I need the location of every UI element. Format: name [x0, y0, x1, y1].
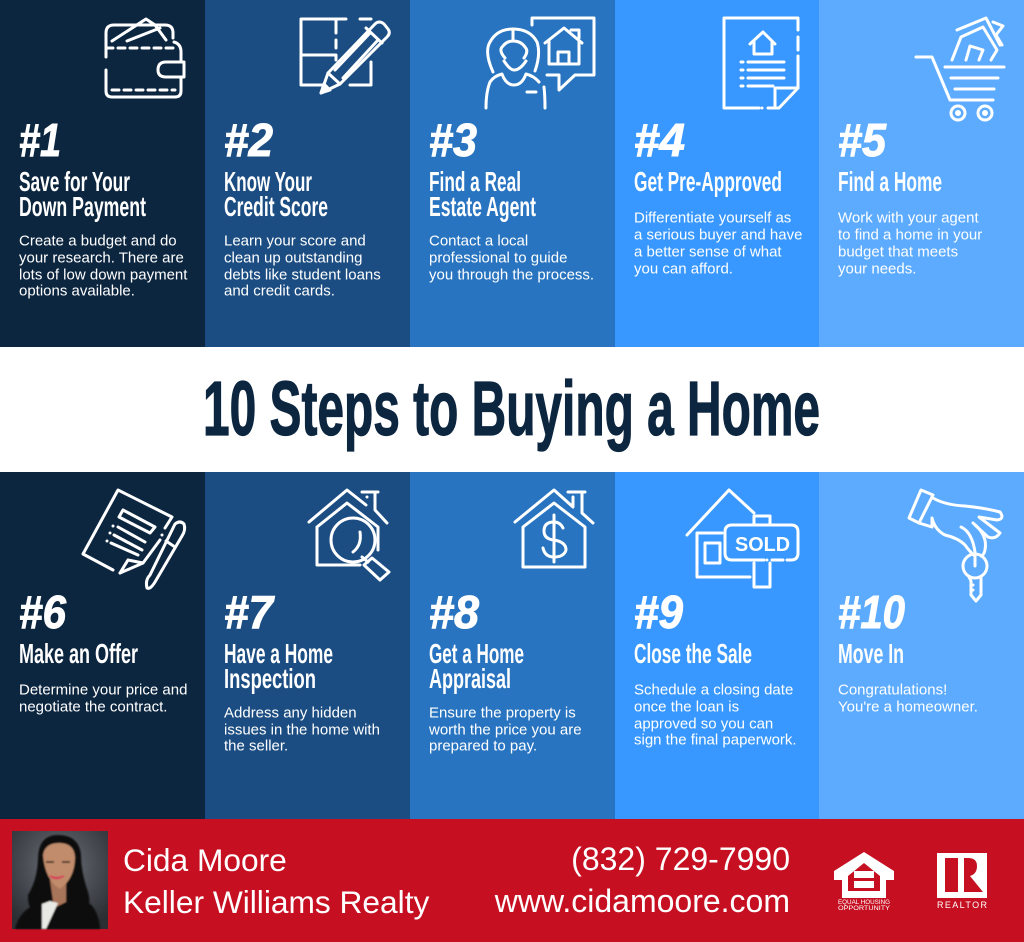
text block: negotiate the contract.	[19, 698, 167, 716]
text block: Ensure the property is	[429, 704, 576, 722]
text block	[634, 210, 802, 278]
text block: your needs.	[838, 260, 916, 278]
icon: house and magnifying glass	[309, 490, 389, 580]
text block: budget that meets	[838, 244, 958, 260]
icon: document with house	[724, 18, 798, 108]
step number: #3	[429, 114, 477, 166]
text block: lots of low down payment	[19, 266, 188, 284]
heading	[429, 166, 536, 222]
icon: equal housing opportunity: OPPORTUNITY	[838, 906, 890, 912]
text block: You're a homeowner.	[838, 698, 978, 716]
text block: issues in the home with	[224, 722, 380, 738]
heading	[224, 166, 328, 222]
text block: options available.	[19, 282, 135, 300]
heading: Get a Home	[429, 638, 524, 669]
text block: Congratulations!	[838, 682, 947, 698]
icon: realtor	[937, 853, 988, 910]
icon: hand holding key	[909, 490, 1002, 601]
text block: Determine your price and	[19, 682, 187, 698]
panel: step 9	[615, 472, 819, 819]
text block: a serious buyer and have	[634, 226, 802, 244]
step number: #4	[634, 114, 685, 166]
panel: step 4	[615, 0, 819, 347]
text block: Learn your score and	[224, 232, 366, 250]
step number: #8	[429, 586, 479, 638]
text block: and credit cards.	[224, 282, 335, 300]
text block: to find a home in your	[838, 226, 982, 244]
text block: clean up outstanding	[224, 250, 362, 266]
heading: Have a Home	[224, 638, 333, 669]
heading: Inspection	[224, 663, 316, 694]
step number: #9	[634, 586, 683, 638]
icon: equal housing opportunity: EQUAL HOUSING	[838, 900, 890, 906]
panel: step 10	[819, 472, 1024, 819]
heading	[19, 166, 146, 222]
step number: #1	[19, 114, 61, 166]
text block: your research. There are	[19, 250, 184, 266]
panel: step 8	[410, 472, 615, 819]
panel: step 6	[0, 472, 205, 819]
website: www.cidamoore.com	[494, 883, 790, 919]
text block: Schedule a closing date	[634, 682, 793, 698]
heading: Appraisal	[429, 663, 511, 694]
text block	[224, 232, 381, 300]
heading: Credit Score	[224, 191, 328, 222]
step number: #7	[224, 586, 275, 638]
icon: floor plan and pencil	[301, 19, 389, 93]
panel: step 3	[410, 0, 615, 347]
sign text: SOLD	[735, 534, 790, 556]
text block: Address any hidden	[224, 704, 357, 722]
panel: step 2	[205, 0, 410, 347]
text block: Differentiate yourself as	[634, 210, 791, 226]
text block: Contact a local	[429, 232, 528, 250]
text block	[634, 682, 797, 748]
icon: agent with speech bubble	[486, 18, 594, 108]
heading: Find a Home	[838, 166, 942, 197]
text block	[19, 232, 188, 300]
heading	[224, 638, 333, 694]
heading: Get Pre-Approved	[634, 166, 782, 197]
text block: you can afford.	[634, 260, 733, 278]
heading: Save for Your	[19, 166, 130, 197]
text block: debts like student loans	[224, 266, 381, 284]
heading	[429, 638, 524, 694]
text block: Work with your agent	[838, 210, 979, 226]
text block: approved so you can	[634, 716, 773, 732]
step number: #10	[838, 586, 905, 638]
heading: Move In	[838, 638, 904, 669]
text block: a better sense of what	[634, 244, 782, 260]
step number: #2	[224, 114, 273, 166]
icon: equal housing opportunity	[834, 852, 894, 912]
step number: #6	[19, 586, 66, 638]
text block	[224, 704, 380, 754]
agent name: Cida Moore	[123, 842, 287, 878]
text block: Create a budget and do	[19, 232, 177, 250]
text block	[19, 682, 187, 716]
text block: the seller.	[224, 738, 288, 754]
brokerage: Keller Williams Realty	[123, 884, 430, 920]
text block: you through the process.	[429, 266, 594, 284]
icon: house with sold sign	[687, 490, 798, 587]
icon: contract and pen	[83, 490, 185, 588]
panel: footer	[0, 819, 1024, 942]
text block: sign the final paperwork.	[634, 732, 797, 748]
text block	[429, 232, 594, 284]
icon: wallet	[106, 19, 184, 97]
text block: professional to guide	[429, 250, 567, 266]
icon: realtor: REALTOR	[937, 900, 988, 910]
heading: Make an Offer	[19, 638, 138, 669]
text block	[428, 704, 582, 754]
icon: house with dollar sign	[515, 490, 593, 567]
heading: Down Payment	[19, 191, 146, 222]
text block	[838, 210, 982, 278]
panel: step 1	[0, 0, 205, 347]
icon: shopping cart with house	[916, 18, 1004, 120]
heading: Know Your	[224, 166, 312, 197]
text block: prepared to pay.	[429, 738, 537, 754]
heading: Estate Agent	[429, 191, 536, 222]
panel: step 7	[205, 472, 410, 819]
phone: (832) 729-7990	[571, 841, 790, 877]
step number: #5	[838, 114, 887, 166]
agent photo	[12, 831, 108, 929]
text block	[838, 682, 978, 716]
text block: worth the price you are	[428, 722, 582, 738]
heading: Find a Real	[429, 166, 521, 197]
heading: Close the Sale	[634, 638, 752, 669]
text block: once the loan is	[634, 698, 739, 716]
panel: step 5	[819, 0, 1024, 347]
